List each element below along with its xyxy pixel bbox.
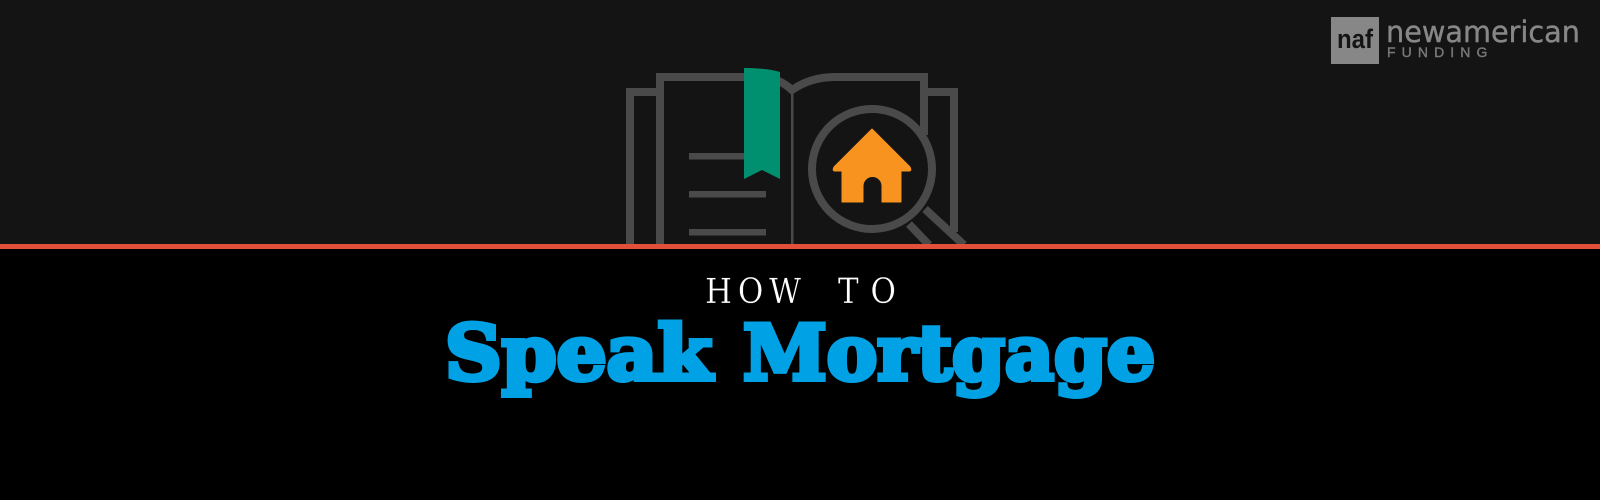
logo [1331, 15, 1580, 64]
heading: speak mortgage: Speak [445, 308, 713, 398]
icon: text lines [689, 153, 766, 236]
icon: bookmark [744, 68, 780, 179]
icon: house [833, 129, 911, 202]
icon: open book with bookmark and magnifier [630, 68, 964, 245]
heading: how to: TO [838, 272, 896, 312]
heading: how to: HOW [705, 272, 801, 312]
icon: book spine [791, 92, 794, 245]
icon: book outline [630, 77, 954, 245]
logo mark [1331, 17, 1379, 64]
heading: speak mortgage: Mortgage [743, 308, 1155, 398]
logo mark: naf [1337, 24, 1374, 54]
logo subtitle: FUNDING [1387, 44, 1493, 60]
heading: speak mortgage [445, 308, 1155, 398]
divider bar [0, 244, 1600, 249]
heading: how to [705, 272, 896, 312]
icon: magnifier [812, 109, 964, 245]
logo wordmark: newamerican [1386, 15, 1580, 49]
